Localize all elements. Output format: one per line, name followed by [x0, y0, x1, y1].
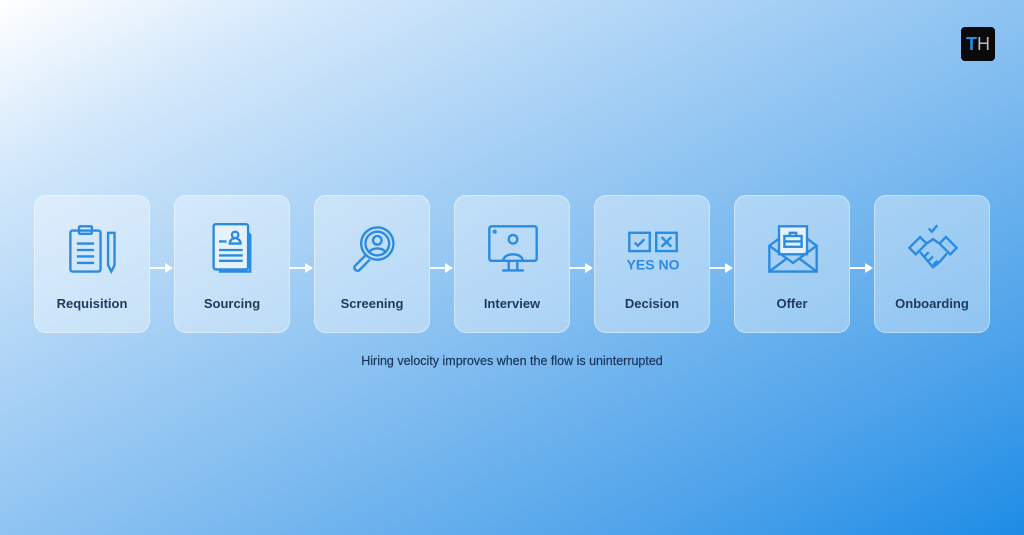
arrow [150, 263, 173, 273]
arrow [430, 263, 453, 273]
card: Interview [454, 195, 570, 333]
caption: Hiring velocity improves when the flow is uninterrupted [361, 354, 663, 368]
icon: yes no [627, 232, 679, 272]
logo [961, 27, 995, 61]
card: Decision [594, 195, 710, 333]
card: Screening: Screening [341, 296, 403, 311]
card: Sourcing: Sourcing [204, 296, 260, 311]
card: Sourcing [174, 195, 290, 333]
logo: TH [966, 34, 990, 54]
icon: monitor [488, 225, 538, 272]
card: Onboarding: Onboarding [895, 296, 969, 311]
icon: magnifier [353, 226, 395, 272]
icon: envelope [768, 225, 818, 273]
card: Interview: Interview [484, 296, 540, 311]
card: Onboarding [874, 195, 990, 333]
card: Offer: Offer [776, 296, 808, 311]
icon: handshake [908, 224, 958, 269]
arrow [290, 263, 313, 273]
arrow [710, 263, 733, 273]
card: Requisition [34, 195, 150, 333]
icon: yes no: YES NO [627, 256, 679, 272]
arrow [570, 263, 593, 273]
card: Screening [314, 195, 430, 333]
icon: clipboard [69, 225, 116, 274]
card: Decision: Decision [625, 296, 679, 311]
card: Requisition: Requisition [57, 296, 127, 311]
icon: resume [212, 223, 252, 273]
card: Offer [734, 195, 850, 333]
arrow [850, 263, 873, 273]
